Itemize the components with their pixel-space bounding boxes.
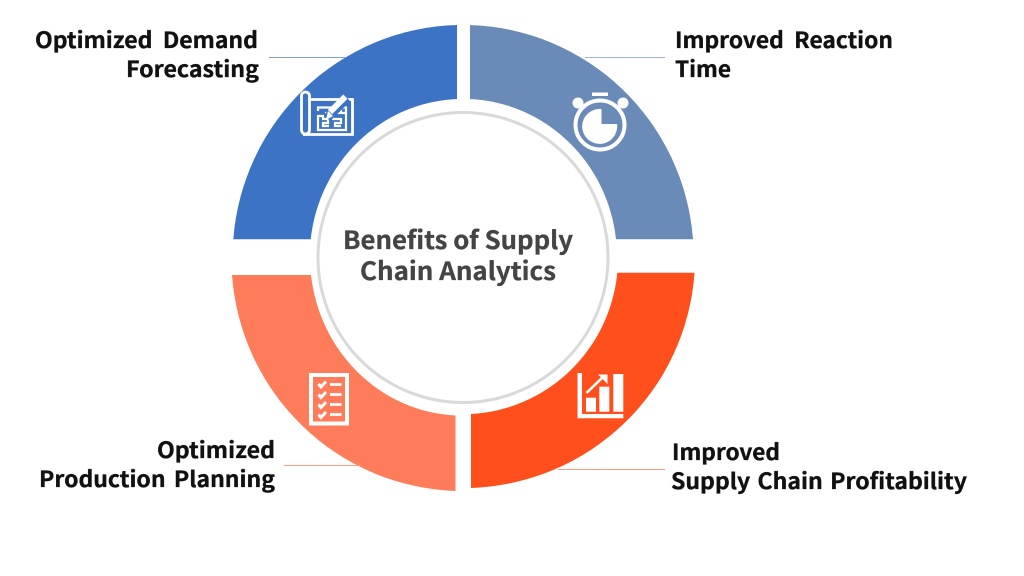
label: optimized production planning: [39, 433, 275, 494]
label: improved reaction time: Time: [675, 52, 731, 84]
center title: Benefits of Supply: [343, 221, 574, 257]
label: improved reaction time: Improved Reaction: [675, 23, 893, 55]
icon: blueprint with pencil: [302, 92, 352, 134]
label: optimized demand forecasting: [35, 23, 259, 84]
label: improved supply chain profitability: Improved: [672, 435, 780, 467]
center ring: [318, 112, 608, 402]
panel: improved supply chain profitability segment: [471, 273, 694, 488]
label: optimized production planning: Production Planning: [39, 462, 275, 494]
label: improved supply chain profitability: [671, 435, 967, 496]
label: optimized demand forecasting: Optimized Demand: [35, 23, 258, 55]
icon: checklist: [311, 375, 347, 424]
leader line: profitability: [558, 468, 665, 470]
center title: [343, 221, 574, 288]
leader line: demand forecasting: [269, 56, 345, 58]
leader line: reaction time: [585, 56, 665, 58]
center title: Chain Analytics: [360, 252, 556, 288]
icon: stopwatch: [572, 92, 628, 150]
panel: optimized demand forecasting segment: [233, 25, 457, 239]
leader line: production planning: [284, 464, 360, 466]
icon: growth bar chart: [578, 373, 623, 418]
label: improved supply chain profitability: Supply Chain Profitability: [671, 464, 967, 496]
label: optimized production planning: Optimized: [157, 433, 275, 465]
label: optimized demand forecasting: Forecasting: [126, 52, 259, 84]
panel: optimized production planning segment: [232, 275, 456, 491]
panel: improved reaction time segment: [470, 25, 693, 239]
label: improved reaction time: [675, 23, 893, 84]
